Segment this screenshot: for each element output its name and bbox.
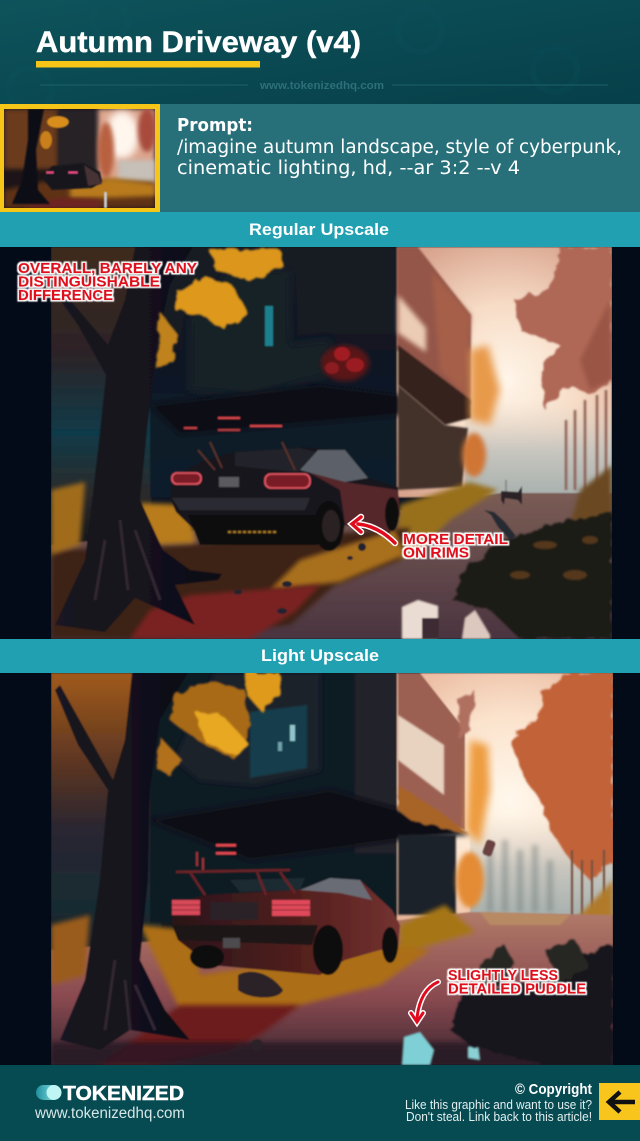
- thumbnail image: [0, 104, 160, 212]
- yellow leaves: [156, 250, 282, 368]
- title: Autumn Driveway (v4): [36, 26, 361, 59]
- copyright text: [405, 1081, 592, 1124]
- callout: overall difference: DISTINGUISHABLE: [18, 274, 160, 290]
- copyright text: Don't steal. Link back to this article!: [406, 1109, 592, 1124]
- footer: [0, 1065, 640, 1141]
- scenery background: [51, 247, 612, 547]
- section header: light upscale: [0, 639, 640, 673]
- prompt text: /imagine autumn landscape, style of cyberpunk,: [177, 137, 622, 158]
- prompt panel: [0, 104, 640, 212]
- callout: overall difference: [18, 260, 197, 304]
- trees on right: [505, 247, 612, 508]
- section header: regular upscale: [0, 212, 640, 247]
- yellow leaves: [158, 673, 280, 775]
- title underline: [36, 61, 260, 68]
- logo: TOKENIZED: [63, 1083, 184, 1105]
- scenery background: [51, 673, 613, 983]
- image: light upscale: [0, 673, 640, 1065]
- callout: rims: MORE DETAIL: [403, 531, 508, 548]
- copyright text: © Copyright: [515, 1081, 592, 1098]
- image: regular upscale: [0, 247, 640, 639]
- arrow: to puddle: [411, 982, 438, 1022]
- callout: puddle: [448, 967, 586, 998]
- bush and animals: [452, 486, 612, 639]
- tree: [55, 247, 222, 632]
- section header: light upscale: Light Upscale: [261, 646, 379, 665]
- prompt text: Prompt:: [177, 115, 253, 136]
- callout: overall difference: OVERALL, BARELY ANY: [18, 260, 197, 277]
- callout: puddle: SLIGHTLY LESS: [448, 967, 558, 984]
- website divider: www.tokenizedhq.com: [259, 80, 384, 92]
- car: [172, 870, 400, 975]
- callout: rims: ON RIMS: [403, 544, 469, 562]
- car: [170, 442, 400, 551]
- building facade: [398, 673, 496, 908]
- ground: [51, 465, 612, 639]
- tree: [55, 673, 190, 1050]
- footer url: www.tokenizedhq.com: [34, 1105, 185, 1122]
- copyright text: Like this graphic and want to use it?: [405, 1097, 592, 1112]
- bush: [450, 940, 613, 1065]
- prompt text: cinematic lighting, hd, --ar 3:2 --v 4: [177, 158, 520, 179]
- header background: [0, 0, 640, 112]
- ground: [51, 905, 613, 1065]
- section header: regular upscale: Regular Upscale: [249, 220, 389, 239]
- building facade: [397, 247, 500, 490]
- prompt text: [177, 115, 622, 179]
- callout: overall difference: DIFFERENCE: [18, 287, 113, 304]
- icon: back arrow: [599, 1083, 640, 1120]
- callout: rims: [403, 531, 508, 562]
- arrow: to rims: [352, 517, 395, 543]
- callout: puddle: DETAILED PUDDLE: [448, 980, 586, 998]
- trees on right: [510, 673, 613, 960]
